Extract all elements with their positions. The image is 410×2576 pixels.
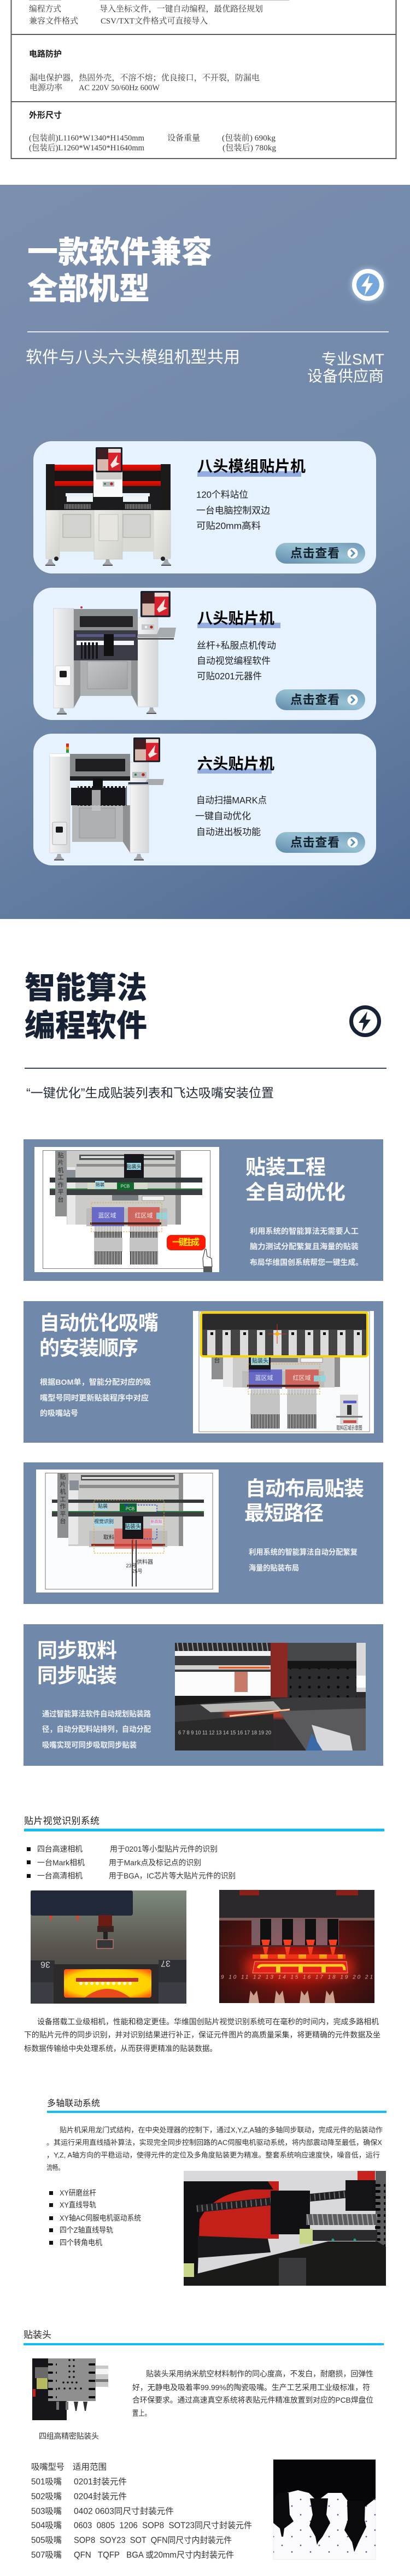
panel: spec table xyxy=(11,0,396,159)
diagram: placement path: 工 xyxy=(60,1496,66,1503)
text: panel body: 的吸嘴站号 xyxy=(40,1409,78,1418)
button: view: 点击查看 xyxy=(290,547,339,560)
table: nozzle models: 503吸嘴 xyxy=(31,2506,62,2516)
text: programming rows: CSV/TXT文件格式可直接导入 xyxy=(101,16,208,26)
button: view xyxy=(276,832,365,853)
text: multi-axis description: 流畅。 xyxy=(46,2164,64,2171)
heading: panel title: 同步贴装 xyxy=(37,1664,117,1687)
diagram: placement path: 贴 xyxy=(60,1473,66,1480)
icon: lightning badge xyxy=(352,268,384,301)
list: axis components: XY轴AC伺服电机驱动系统 xyxy=(60,2214,141,2222)
diagram: one-click generate: 贴装头 xyxy=(126,1163,142,1169)
button: view: 点击查看 xyxy=(290,835,339,850)
text: features xyxy=(195,795,267,838)
heading: one software all models: 全部机型 xyxy=(27,271,150,306)
text: features: 一台电脑控制双边 xyxy=(196,505,270,516)
list: cameras: 用于Mark点及标记点的识别 xyxy=(109,1858,201,1867)
table: nozzle models: 0402 0603同尺寸封装元件 xyxy=(74,2506,174,2516)
panel: nozzle installation order xyxy=(24,1301,383,1443)
text: features: 可贴20mm高料 xyxy=(196,520,261,531)
diagram: placement path: 作 xyxy=(60,1503,66,1510)
panel: card eight-head machine xyxy=(33,588,376,720)
text: head description: 好，无静电及吸着率99.99%的陶瓷吸嘴。生产工艺采用工业级标准，符 xyxy=(132,2383,370,2392)
diagram: placement path: 供料器 xyxy=(137,1558,153,1566)
text: panel body: 径，自动分配料站排列，自动分配 xyxy=(42,1725,151,1734)
text: features: 丝杆+私服点机传动 xyxy=(197,641,276,651)
text: dimension rows: (包装前) 690kg xyxy=(222,133,276,143)
title: six-head: 六头贴片机 xyxy=(197,756,274,772)
list: cameras: 一台Mark相机 xyxy=(37,1858,85,1867)
diagram: placement path: 台 xyxy=(60,1517,66,1525)
diagram: placement path: 平 xyxy=(60,1511,66,1518)
list: cameras: 用于BGA，IC芯片等大贴片元件的识别 xyxy=(109,1871,236,1880)
diagram: placement path: 贴装头 xyxy=(125,1523,141,1530)
heading: placement head: 贴装头 xyxy=(24,2330,51,2340)
text: panel body xyxy=(249,1548,358,1572)
list: cameras: 用于0201等小型贴片元件的识别 xyxy=(110,1845,218,1853)
heading: panel title: 全自动优化 xyxy=(245,1181,345,1204)
text: features: 自动进出板功能 xyxy=(196,827,261,838)
heading: circuit protection: 电路防护 xyxy=(29,49,62,59)
text: panel body: 利用系统的智能算法自动分配繁复 xyxy=(249,1548,358,1556)
heading: panel title xyxy=(39,1312,159,1359)
title: eight-head module: 八头模组贴片机 xyxy=(197,458,306,475)
text: circuit protection rows: 电源功率 xyxy=(30,83,62,92)
heading: smart algorithm programming software xyxy=(25,971,147,1043)
diagram: nozzle station: 红区域 xyxy=(293,1374,311,1381)
text: supplier tag xyxy=(307,351,384,385)
button: view: 点击查看 xyxy=(290,693,339,706)
heading: smart algorithm programming software: 编程软件 xyxy=(25,1008,147,1043)
section: placement head xyxy=(24,2330,384,2560)
photo: camera under nozzle xyxy=(31,1890,186,2004)
section: vision recognition xyxy=(24,1816,384,2053)
diagram: one-click generate: 贴 xyxy=(58,1151,63,1159)
machine: eight-head module xyxy=(45,447,171,566)
heading: multi-axis: 多轴联动系统 xyxy=(47,2098,100,2108)
title: eight-head: 八头贴片机 xyxy=(197,610,274,627)
text: multi-axis description xyxy=(46,2126,383,2171)
text: panel body: 吸嘴实现可同步吸取同步贴装 xyxy=(42,1741,137,1749)
text: section subtitle: “一键优化”生成贴装列表和飞达吸嘴安装位置 xyxy=(26,1086,274,1100)
heading: smart algorithm programming software: 智能算法 xyxy=(25,971,147,1005)
text: features xyxy=(197,641,276,681)
heading: panel title: 自动优化吸嘴 xyxy=(39,1312,159,1334)
text: features xyxy=(196,490,270,531)
diagram: placement path: 片 xyxy=(60,1481,66,1488)
inset: feed area thumbnail: 取料区域示意图 xyxy=(337,1425,362,1431)
heading: one software all models xyxy=(27,235,212,306)
text: multi-axis description: ，Y,Z, A轴方向的平稳运动，使得元件的定位及多角度贴装更为精准。整套系统响应速度快，噪音低，运行 xyxy=(46,2151,380,2159)
diagram: placement path: 23号 xyxy=(126,1563,137,1568)
text: dimension rows: (包装后) 780kg xyxy=(222,143,276,153)
list: axis components xyxy=(49,2188,141,2247)
text: panel body: 海量的贴装布局 xyxy=(249,1564,299,1572)
heading: panel title xyxy=(37,1639,117,1687)
photo: red-lit placement head: 6 7 8 9 10 11 12 13 14 15 16 17 18 19 20 xyxy=(178,1730,271,1736)
heading: panel title: 贴装工程 xyxy=(245,1156,326,1179)
text: programming rows xyxy=(29,4,263,26)
diagram: placement path: 机 xyxy=(60,1488,66,1495)
diagram: one-click generate: 机 xyxy=(58,1166,63,1174)
photo: nozzles close-up xyxy=(273,2460,376,2560)
heading: panel title: 的安装顺序 xyxy=(39,1337,138,1359)
photo: nozzles lit red: 9 10 11 12 13 14 15 16 17 18 19 20 21 xyxy=(221,1975,373,1980)
heading: panel title xyxy=(244,1477,364,1524)
diagram: one-click generate: 片 xyxy=(58,1159,63,1166)
heading: outer dimensions: 外形尺寸 xyxy=(29,110,62,120)
photo: camera under nozzle: 37 xyxy=(161,1958,171,1968)
list: axis components: XY研磨丝杆 xyxy=(60,2188,96,2197)
text: programming rows: 兼容文件格式 xyxy=(29,16,78,26)
diagram: one-click generate: 平 xyxy=(58,1189,63,1196)
table: nozzle models: 0201封装元件 xyxy=(74,2477,127,2486)
text: panel body: 通过智能算法软件自动规划贴装路 xyxy=(42,1709,151,1718)
text: programming rows: 编程方式 xyxy=(29,4,61,14)
text: features: 可贴0201元器件 xyxy=(197,671,262,681)
text: multi-axis description: 贴片机采用龙门式结构，在中央处理器的控制下，通过X,Y,Z,A轴的多轴同步联动，完成元件的贴装动作 xyxy=(60,2126,383,2134)
icon: lightning badge dark xyxy=(351,1007,379,1035)
machine: eight-head xyxy=(54,591,176,715)
text: circuit protection rows: 漏电保护器，热固外壳，不溶不熔；优良接口，不开裂，防漏电 xyxy=(30,73,260,83)
diagram: placement path: 25号 xyxy=(132,1568,143,1574)
text: vision description xyxy=(24,2017,380,2053)
button: view xyxy=(276,543,365,564)
inset: feed area thumbnail xyxy=(336,1395,362,1431)
text: head description: 贴装头采用纳米航空材料制作的同心度高，不发白，耐磨损，回弹性 xyxy=(146,2369,373,2378)
text: head description xyxy=(132,2369,373,2417)
text: features: 自动视觉编程软件 xyxy=(197,656,271,666)
text: dimension rows: (包装前)L1160*W1340*H1450mm xyxy=(29,133,144,143)
button: one-click generate: 一键生成 xyxy=(172,1237,200,1248)
heading: panel title: 同步取料 xyxy=(37,1639,117,1662)
text: panel body: 嘴型号同时更新贴装程序中对应 xyxy=(40,1394,149,1402)
photo: ball screw and cable chain xyxy=(184,2171,386,2286)
diagram: placement path: 视觉识别 xyxy=(94,1518,114,1524)
text: vision description: 下的贴片元件的同步识别，并对识别结果进行补正，保证元件图片的高质量采集，将更精确的元件数据及坐 xyxy=(24,2030,380,2039)
panel: synchronous pick and place xyxy=(24,1624,383,1766)
photo: nozzles lit red xyxy=(219,1890,374,2003)
text: dimension rows xyxy=(29,133,276,153)
text: dimension rows: 设备重量 xyxy=(167,133,200,143)
machine: six-head xyxy=(50,737,164,860)
text: features: 一键自动优化 xyxy=(195,811,251,821)
diagram: nozzle station: 台 xyxy=(214,1356,220,1364)
diagram: nozzle station: 蓝区域 xyxy=(255,1374,273,1381)
table: nozzle models: 0603 0805 1206 SOP8 SOT23同尺寸封装元件 xyxy=(74,2520,252,2530)
diagram: one-click generate: 蓝区域 xyxy=(98,1212,116,1219)
text: circuit protection rows: AC 220V 50/60Hz 600W xyxy=(79,84,160,92)
heading: panel title: 最短路径 xyxy=(244,1502,324,1524)
diagram: nozzle station xyxy=(193,1311,374,1433)
text: head description: 置上。 xyxy=(132,2409,151,2417)
button: view xyxy=(276,689,365,710)
table: nozzle models: 507吸嘴 xyxy=(31,2550,62,2560)
heading: panel title: 自动布局贴装 xyxy=(245,1477,364,1500)
panel: compatible machines section xyxy=(0,185,410,919)
diagram: one-click generate: 红区域 xyxy=(134,1212,153,1219)
list: axis components: 四个转角电机 xyxy=(60,2238,102,2247)
text: vision description: 设备搭载工业级相机，性能和稳定更佳。华维国创贴片视觉识别系统可在毫秒的时间内，完成多路相机 xyxy=(37,2017,379,2026)
heading: panel title xyxy=(245,1156,345,1204)
diagram: placement path: 贴装 xyxy=(98,1503,108,1509)
list: cameras xyxy=(27,1845,236,1880)
text: head description: 合环保要求。通过高速真空系统将表贴元件精准放置到对应的PCB焊盘位 xyxy=(132,2396,373,2404)
callout: yellow nozzle zoom xyxy=(201,1313,367,1356)
text: panel body: 布局华维国创系统帮您一键生成。 xyxy=(250,1258,363,1267)
button: one-click generate xyxy=(167,1235,206,1250)
table: nozzle models: 502吸嘴 xyxy=(31,2492,62,2502)
diagram: one-click generate: PCB xyxy=(121,1184,130,1189)
table: nozzle models: 0204封装元件 xyxy=(74,2492,127,2502)
photo: red-lit placement head xyxy=(175,1643,366,1750)
diagram: placement path: 取料 xyxy=(103,1534,114,1541)
text: circuit protection rows xyxy=(30,73,260,92)
diagram: one-click generate: 工 xyxy=(58,1174,63,1181)
diagram: placement path: 新高贴 xyxy=(151,1519,162,1524)
panel: card eight-head module machine xyxy=(33,441,376,573)
heading: one software all models: 一款软件兼容 xyxy=(27,235,212,269)
diagram: one-click generate xyxy=(34,1147,219,1272)
table: nozzle models: 505吸嘴 xyxy=(31,2536,62,2545)
section: multi-axis motion xyxy=(46,2098,386,2286)
diagram: placement path xyxy=(36,1470,219,1593)
caption: head: 四组高精密贴装头 xyxy=(39,2432,99,2440)
diagram: one-click generate: 作 xyxy=(58,1181,63,1189)
panel: card six-head machine xyxy=(33,734,376,865)
text: panel body xyxy=(250,1227,363,1267)
table: nozzle models: 吸嘴型号 xyxy=(31,2462,65,2472)
text: multi-axis description: 。其运行采用直线插补算法，实现完全同步控制回路的AC伺服电机驱动系统，将内部震动降至最低，确保X xyxy=(46,2139,382,2146)
list: cameras: 一台高清相机 xyxy=(37,1871,83,1880)
text: panel body: 利用系统的智能算法无需要人工 xyxy=(250,1227,359,1236)
list: axis components: 四个Z轴直线导轨 xyxy=(60,2226,113,2234)
panel: shortest path layout xyxy=(24,1462,383,1604)
table: nozzle models: 504吸嘴 xyxy=(31,2520,62,2530)
text: vision description: 标数据传输给中央处理系统，从而获得更精准的贴装数据。 xyxy=(24,2044,217,2053)
diagram: nozzle station: 贴装头 xyxy=(252,1357,268,1365)
text: programming rows: 导入坐标文件，一键自动编程，最优路径规划 xyxy=(99,4,263,14)
table: nozzle models: 501吸嘴 xyxy=(31,2477,62,2486)
list: cameras: 四台高速相机 xyxy=(37,1845,83,1853)
table: nozzle models xyxy=(31,2462,252,2560)
photo: head assembly xyxy=(32,2358,108,2420)
text: features: 120个料站位 xyxy=(196,490,248,500)
diagram: placement path: PCB xyxy=(126,1507,134,1511)
table: nozzle models: 适用范围 xyxy=(73,2462,107,2472)
table: nozzle models: QFN TQFP BGA 或20mm尺寸内封装元件 xyxy=(74,2550,234,2560)
icon: pointer hand xyxy=(203,1249,212,1272)
text: panel body: 根据BOM单，智能分配对应的吸 xyxy=(40,1378,151,1386)
text: subtitle: 软件与八头六头模组机型共用 xyxy=(26,349,240,366)
text: panel body xyxy=(42,1709,151,1749)
diagram: one-click generate: 台 xyxy=(58,1196,63,1203)
panel: full auto optimisation xyxy=(24,1139,383,1281)
text: panel body xyxy=(40,1378,151,1418)
photo: camera under nozzle: 36 xyxy=(40,1959,50,1969)
text: supplier tag: 专业SMT xyxy=(321,351,384,367)
heading: vision system: 贴片视觉识别系统 xyxy=(24,1816,99,1826)
diagram: one-click generate: 贴装 xyxy=(96,1182,104,1187)
table: nozzle models: SOP8 SOY23 SOT QFN同尺寸内封装元件 xyxy=(74,2536,232,2545)
text: supplier tag: 设备供应商 xyxy=(307,367,384,385)
text: panel body: 脑力测试分配繁复且海量的贴装 xyxy=(250,1242,359,1251)
text: features: 自动扫描MARK点 xyxy=(196,795,267,806)
text: dimension rows: (包装后)L1260*W1450*H1640mm xyxy=(29,143,144,153)
list: axis components: XY直线导轨 xyxy=(60,2200,96,2209)
